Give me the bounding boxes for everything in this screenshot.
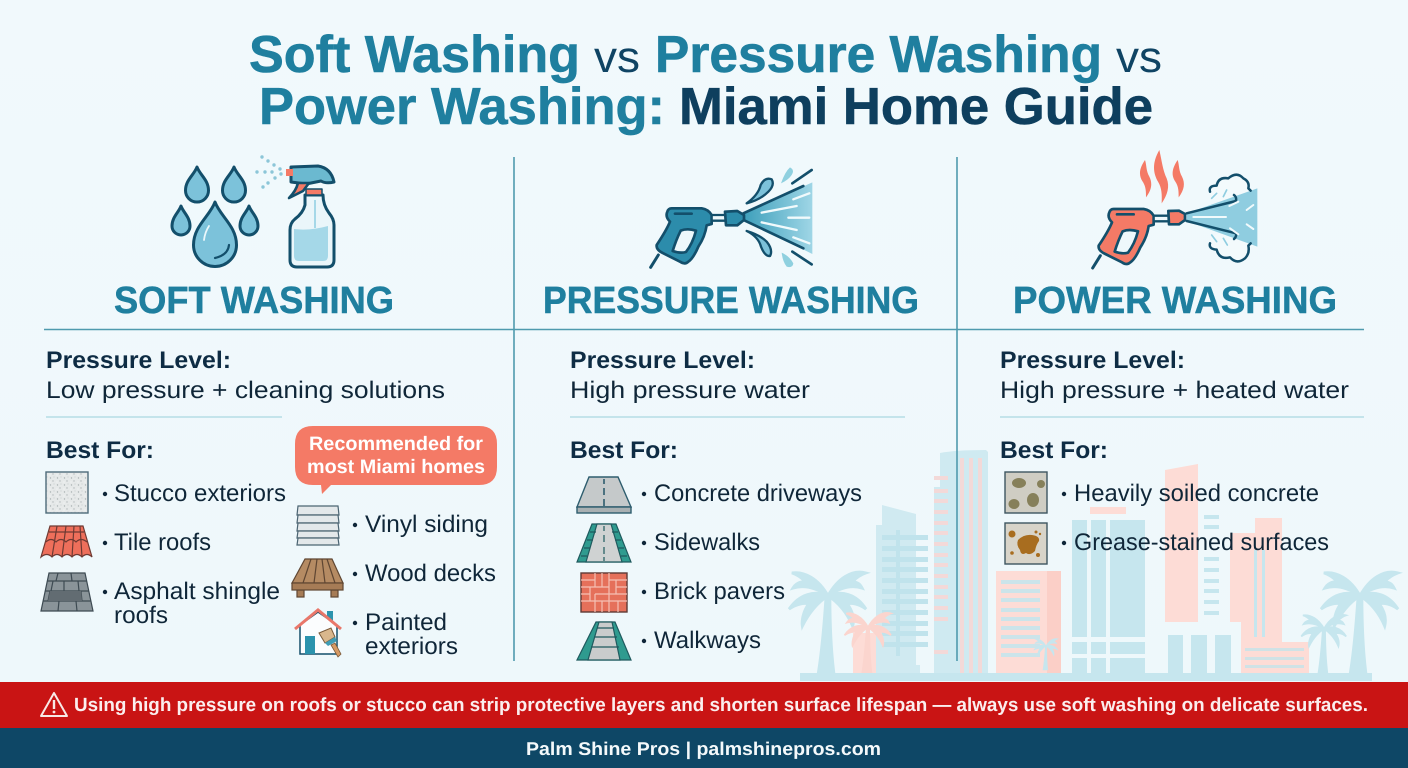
icon: vinyl siding [297, 506, 339, 545]
best for label: Best For: [570, 437, 678, 464]
item: tile roofs: Tile roofs [114, 529, 211, 556]
icon: power washer with heat and steam [1093, 150, 1257, 268]
item: concrete driveways: Concrete driveways [654, 480, 862, 507]
icon: walkway [577, 622, 631, 660]
heading: pressure washing: PRESSURE WASHING [543, 280, 919, 322]
panel: soft washing [41, 155, 497, 660]
callout: recommended: Recommended for [309, 433, 483, 455]
title: vs [594, 33, 640, 82]
pressure level: Pressure Level: [46, 347, 231, 374]
icon: pressure washer [651, 167, 812, 267]
icon: water drops [172, 167, 258, 266]
pressure level: Pressure Level: [570, 347, 755, 374]
column dividers [44, 157, 1364, 661]
icon: painted house [295, 610, 341, 657]
icon: wood deck [292, 559, 343, 597]
skyline: palm trees [789, 572, 1398, 673]
item: brick pavers: Brick pavers [654, 578, 785, 605]
footer text: Palm Shine Pros | palmshinepros.com [526, 738, 881, 760]
heading: power washing: POWER WASHING [1013, 280, 1337, 322]
callout: recommended [295, 426, 497, 494]
icon: brick pavers [581, 573, 627, 612]
pressure level: Low pressure + cleaning solutions [46, 377, 445, 404]
title: Soft Washing [249, 26, 580, 84]
skyline: blue block building [1090, 507, 1126, 514]
item: asphalt shingle roofs: roofs [114, 602, 168, 629]
item: sidewalks: Sidewalks [654, 529, 760, 556]
item: grease-stained surfaces: Grease-stained surfaces [1074, 529, 1329, 556]
skyline: pink tall buildings [1165, 464, 1198, 622]
callout: recommended: most Miami homes [307, 456, 485, 478]
icon: grease stain [1005, 523, 1047, 564]
icon: concrete driveway [577, 477, 631, 513]
warning banner [0, 682, 1408, 728]
icon: tile roof [41, 526, 92, 557]
skyline: tall tower [934, 450, 988, 673]
warning text: Using high pressure on roofs or stucco can strip protective layers and shorten surface lifespan — always use soft washing on delicate surfaces. [74, 695, 1368, 716]
skyline background illustration [789, 450, 1398, 681]
item: wood decks: Wood decks [365, 560, 496, 587]
title: Miami Home Guide [679, 78, 1153, 136]
icon: asphalt shingle roof [41, 573, 93, 611]
icon: sidewalk [577, 524, 631, 562]
item: asphalt shingle roofs: Asphalt shingle [114, 578, 280, 605]
skyline: ground [800, 673, 1372, 681]
best for label: Best For: [1000, 437, 1108, 464]
pressure level: Pressure Level: [1000, 347, 1185, 374]
skyline: pink building with bars [996, 571, 1061, 673]
pressure level [46, 347, 445, 404]
pressure level: High pressure + heated water [1000, 377, 1349, 404]
icon: stucco [46, 472, 88, 513]
icon: spray bottle [255, 155, 334, 267]
icon: warning triangle [41, 693, 67, 716]
pressure level [1000, 347, 1349, 404]
pressure level [570, 347, 810, 404]
title: Pressure Washing [655, 26, 1102, 84]
item: painted exteriors: exteriors [365, 633, 458, 660]
item: stucco exteriors: Stucco exteriors [114, 480, 286, 507]
title: Power Washing: [259, 78, 665, 136]
best for label: Best For: [46, 437, 154, 464]
skyline: pink short building [853, 633, 876, 673]
item: heavily soiled concrete: Heavily soiled concrete [1074, 480, 1319, 507]
title: vs [1116, 33, 1162, 82]
pressure level: High pressure water [570, 377, 810, 404]
item: walkways: Walkways [654, 627, 761, 654]
heading: soft washing: SOFT WASHING [114, 280, 394, 322]
footer bar [0, 728, 1408, 768]
item: painted exteriors [353, 609, 458, 660]
item: vinyl siding: Vinyl siding [365, 511, 488, 538]
icon: soiled concrete [1005, 472, 1047, 513]
title [249, 26, 1162, 136]
panel: power washing [1000, 150, 1349, 564]
item: asphalt shingle roofs [103, 578, 280, 629]
panel: pressure washing [543, 167, 919, 660]
item: painted exteriors: Painted [365, 609, 447, 636]
